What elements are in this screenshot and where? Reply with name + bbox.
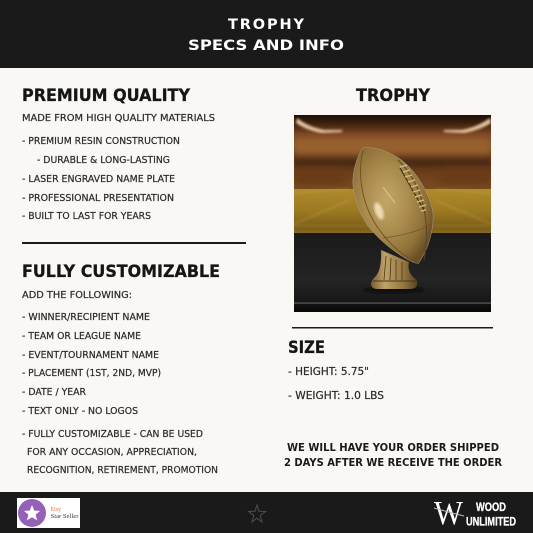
feature list: - PROFESSIONAL PRESENTATION (22, 193, 174, 204)
etsy star seller badge: Star Seller (50, 514, 78, 520)
shipping note: WE WILL HAVE YOUR ORDER SHIPPED (287, 442, 499, 454)
customization list: - PLACEMENT (1ST, 2ND, MVP) (22, 368, 161, 379)
heading: size: SIZE (288, 338, 325, 358)
customization list: - WINNER/RECIPIENT NAME (22, 312, 150, 323)
feature list: - PREMIUM RESIN CONSTRUCTION (22, 136, 180, 147)
panel: fully customizable (22, 262, 220, 476)
icon: center star (248, 505, 266, 522)
customization list: - TEXT ONLY - NO LOGOS (22, 406, 138, 417)
panel: premium quality (22, 86, 215, 222)
subheading: add the following: ADD THE FOLLOWING: (22, 290, 132, 301)
stadium lights (296, 118, 491, 133)
subheading: materials: MADE FROM HIGH QUALITY MATERIALS (22, 113, 215, 124)
wood unlimited logo: UNLIMITED (466, 514, 516, 528)
etsy star seller badge (17, 498, 80, 528)
size specs: - HEIGHT: 5.75" (288, 366, 369, 378)
customization list (22, 312, 161, 417)
header title (188, 17, 344, 54)
feature list (22, 136, 180, 222)
size specs: - WEIGHT: 1.0 LBS (288, 390, 384, 402)
stands (294, 138, 491, 184)
feature list: - DURABLE & LONG-LASTING (37, 155, 170, 166)
header band (0, 0, 533, 68)
wood unlimited logo: W (434, 495, 464, 532)
black floor (294, 233, 491, 312)
etsy star seller badge: Etsy (50, 507, 61, 513)
trophy football (353, 148, 433, 264)
panel: size (288, 338, 384, 402)
customization list: - TEAM OR LEAGUE NAME (22, 331, 141, 342)
heading: trophy: TROPHY (356, 86, 431, 106)
product photo: football trophy (294, 115, 491, 312)
heading: fully customizable: FULLY CUSTOMIZABLE (22, 262, 220, 282)
trophy pedestal (364, 250, 424, 293)
wood unlimited logo: WOOD (476, 500, 506, 514)
customization note (22, 429, 218, 476)
size specs (288, 366, 384, 402)
heading: premium quality: PREMIUM QUALITY (22, 86, 191, 106)
feature list: - BUILT TO LAST FOR YEARS (22, 211, 151, 222)
customization note: RECOGNITION, RETIREMENT, PROMOTION (27, 465, 218, 476)
customization note: FOR ANY OCCASION, APPRECIATION, (27, 447, 197, 458)
feature list: - LASER ENGRAVED NAME PLATE (22, 174, 175, 185)
customization list: - EVENT/TOURNAMENT NAME (22, 350, 159, 361)
shipping note (284, 442, 502, 469)
header title: TROPHY (228, 17, 304, 33)
icon: purple badge star (18, 499, 46, 527)
customization list: - DATE / YEAR (22, 387, 86, 398)
field (294, 189, 491, 233)
shipping note: 2 DAYS AFTER WE RECEIVE THE ORDER (284, 457, 502, 469)
footer band (0, 492, 533, 533)
wood unlimited logo (434, 495, 516, 532)
header title: SPECS AND INFO (188, 38, 344, 54)
customization note: - FULLY CUSTOMIZABLE - CAN BE USED (22, 429, 203, 440)
